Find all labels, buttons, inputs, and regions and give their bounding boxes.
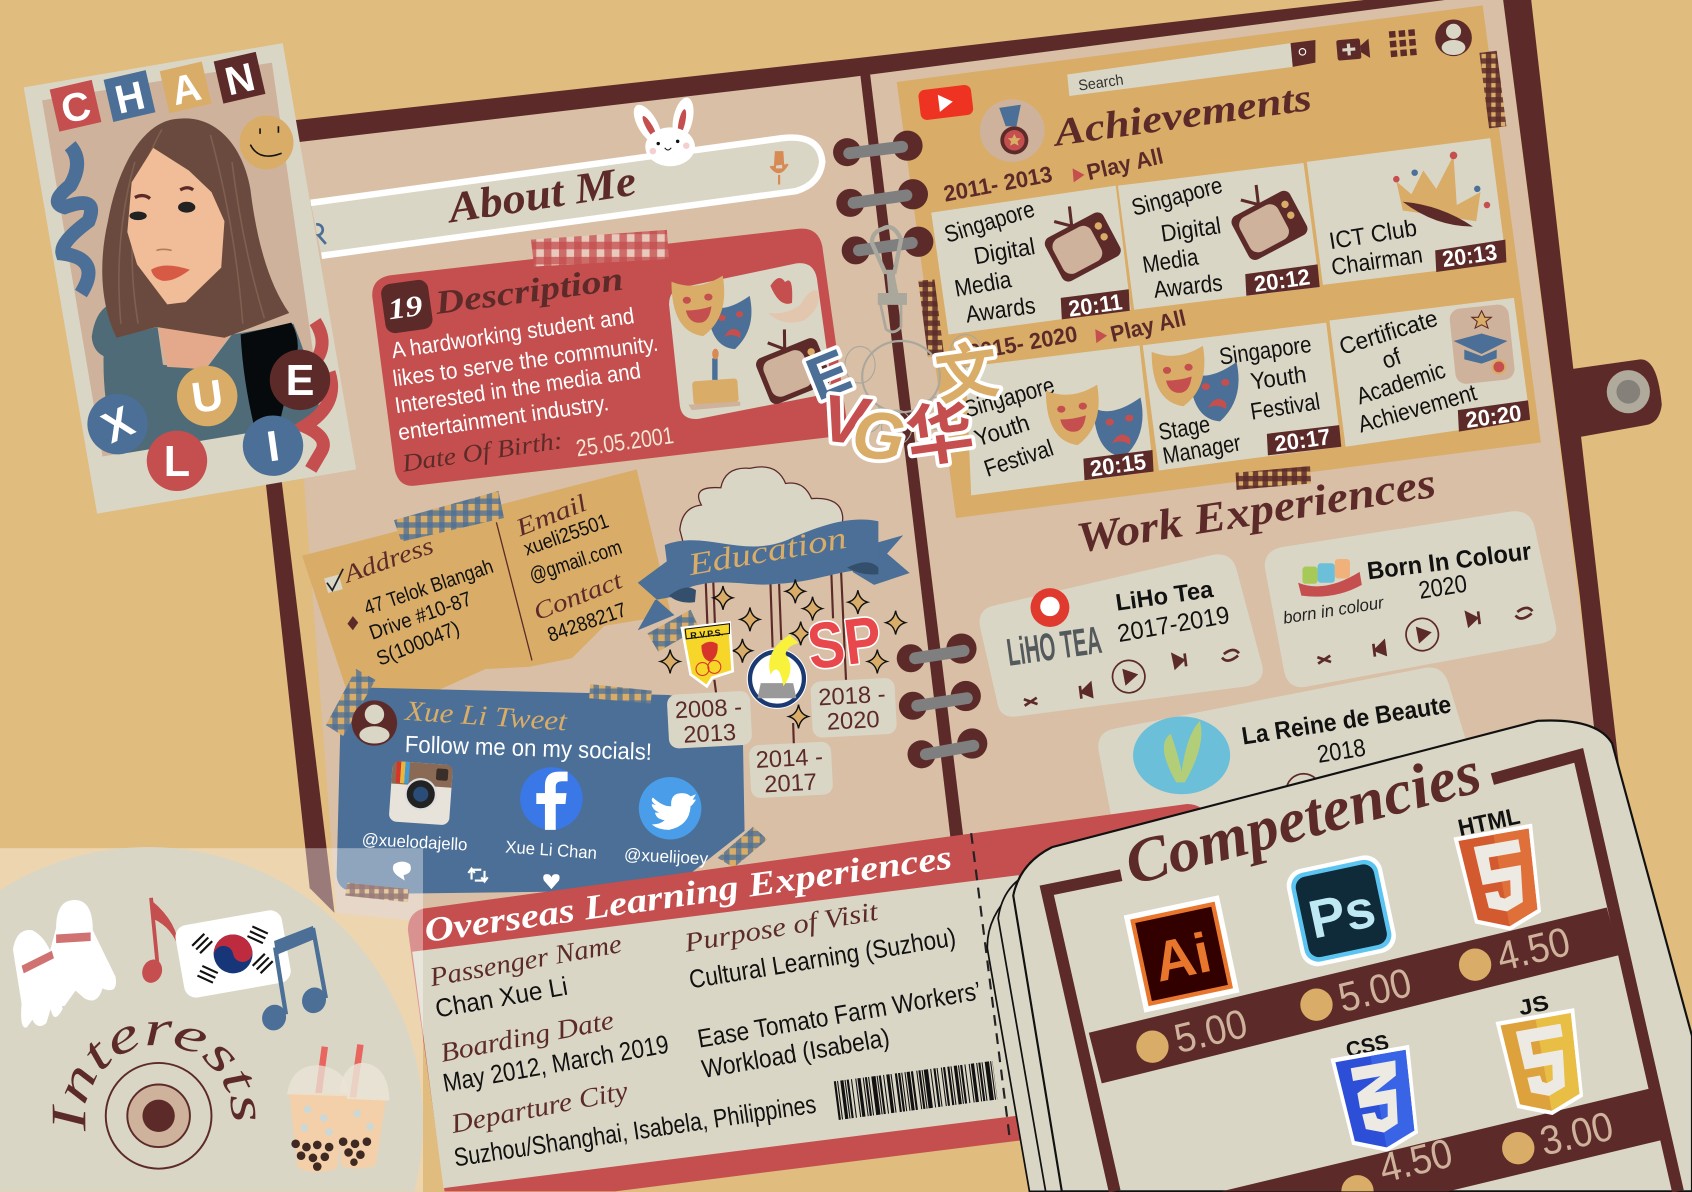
card: Stage Manager: Stage — [1157, 412, 1212, 446]
purpose of visit: Workload (Isabela) — [700, 1024, 892, 1084]
letter block C — [50, 80, 102, 134]
card: Digital Media Awards 1 — [931, 186, 1131, 335]
heading: Achievements: Achievements — [1048, 76, 1314, 155]
badge: RVPS — [682, 623, 733, 686]
panel: competencies device — [987, 720, 1692, 1191]
icon: JavaScript: JS — [1516, 990, 1551, 1020]
card: Singapore Youth Festival: Youth — [971, 410, 1033, 452]
icon: add video — [1336, 38, 1370, 61]
hanging strings — [706, 561, 846, 755]
card: Digital Media Awards 1: 20:11 — [1067, 288, 1124, 322]
letter circle L — [147, 431, 207, 491]
card: Born In Colour: Born In Colour — [1366, 538, 1533, 585]
address text: 47 Telok Blangah — [361, 555, 496, 620]
card: Born In Colour: 2020 — [1417, 571, 1469, 605]
boarding date — [438, 1005, 671, 1098]
icon: apps grid — [1389, 29, 1417, 57]
address text — [338, 532, 496, 670]
tag: 2008-2013 — [667, 691, 752, 749]
card: Digital Media Awards 1: Digital — [972, 234, 1037, 270]
card: ICT Club Chairman — [1307, 138, 1506, 285]
letter circle I — [239, 412, 307, 480]
rating: CSS3 — [1341, 1130, 1457, 1191]
email text — [511, 490, 625, 587]
card: Stage Manager — [1143, 323, 1341, 471]
tag: 2018-2020 — [810, 678, 897, 738]
departure city: Departure City — [448, 1075, 630, 1139]
heading: About Me: About Me — [442, 158, 639, 233]
letter block H — [104, 70, 156, 124]
panel: portrait card — [24, 43, 356, 514]
logo: LiHo: LiHO TEA — [1004, 619, 1104, 675]
rating: HTML5 — [1459, 918, 1574, 981]
description text: A hardworking student and — [390, 302, 636, 363]
card: Certificate of Academic Achievement: 20:20 — [1464, 399, 1523, 433]
icon: HTML5: HTML — [1456, 804, 1522, 842]
card: Digital Media Awards 2: Digital — [1159, 213, 1223, 248]
letter block A — [160, 62, 212, 116]
ribbon: red — [304, 322, 332, 469]
card: Digital Media Awards 2 — [1118, 163, 1320, 310]
letter circle U — [173, 362, 241, 430]
icon: pin — [347, 616, 358, 630]
tape — [326, 669, 767, 902]
age badge — [380, 279, 434, 334]
icon: Photoshop: Ps — [1304, 878, 1381, 950]
rating: JavaScript: 3.00 — [1536, 1103, 1618, 1164]
date of birth: Date Of Birth: — [399, 427, 565, 478]
icon: microphone — [770, 152, 788, 185]
icon: target — [106, 1063, 212, 1169]
icon: heart — [543, 874, 560, 889]
letter circle X: X — [95, 397, 141, 453]
icon: comment — [393, 862, 411, 881]
search box: Search — [1077, 71, 1125, 95]
purpose of visit: Ease Tomato Farm Workers’ — [696, 977, 983, 1054]
card: Stage Manager: Manager — [1161, 430, 1243, 470]
departure city: Suzhou/Shanghai, Isabela, Philippines — [452, 1091, 818, 1172]
card: La Reine de Beaute: La Reine de Beaute — [1240, 691, 1453, 751]
heading: Interests: Interests — [52, 1021, 256, 1132]
keychain — [845, 227, 981, 445]
panel: education — [638, 467, 910, 799]
ribbon banner: Education — [685, 520, 849, 582]
card: Singapore Youth Festival: Singapore — [961, 373, 1058, 423]
contact text: Contact — [530, 567, 627, 626]
icon: medal — [980, 99, 1045, 162]
player controls — [1314, 605, 1536, 664]
card: Stage Manager: Youth — [1249, 362, 1308, 396]
boarding date: Boarding Date — [438, 1005, 616, 1068]
tape — [1479, 51, 1506, 128]
logo: Born In Colour: born in colour — [1282, 592, 1386, 628]
panel: tweet socials — [326, 669, 767, 902]
portrait illustration — [92, 118, 322, 454]
letter block N — [214, 52, 266, 106]
ribbon banner — [638, 519, 910, 630]
tag: 2014-2017: 2014 - — [755, 744, 824, 774]
tape — [531, 230, 669, 267]
panel: about me search bar — [311, 138, 822, 256]
letter circle U: U — [189, 371, 226, 423]
letter block A: A — [167, 65, 205, 114]
logo: LiHo — [1004, 588, 1104, 675]
icon: smiley — [240, 115, 294, 169]
panel: achievements — [897, 5, 1541, 518]
address text: S(100047) — [373, 617, 463, 670]
card: Digital Media Awards 1: Singapore — [942, 197, 1038, 249]
tag: 2008-2013: 2008 - — [674, 695, 743, 724]
boarding date: May 2012, March 2019 — [441, 1031, 671, 1098]
description text: Interested in the media and — [393, 357, 642, 418]
icon: Illustrator: Ai — [1148, 920, 1216, 994]
badge: secondary school — [747, 635, 807, 709]
tape — [394, 491, 504, 542]
label: instagram: @xuelodajello — [361, 829, 468, 854]
icon: korean flag — [174, 908, 293, 999]
passenger name — [426, 928, 624, 1024]
icon: HTML5 — [1453, 804, 1550, 937]
letter block N: N — [221, 55, 259, 104]
card: LiHo Tea: LiHo Tea — [1114, 577, 1216, 617]
icon: facebook — [520, 767, 583, 830]
card: ICT Club Chairman: ICT Club — [1327, 216, 1419, 255]
right strap with button — [1571, 359, 1662, 437]
icon: youtube — [918, 84, 974, 121]
card: ICT Club Chairman: 20:13 — [1441, 239, 1499, 272]
tag: 2018-2020: 2018 - — [818, 682, 886, 711]
icon: CSS3 — [1330, 1029, 1427, 1159]
icon: bunny — [628, 96, 697, 166]
description text: entertainment industry. — [396, 389, 610, 445]
tag: 2014-2017 — [749, 741, 833, 799]
email text: xueli25501 — [521, 510, 612, 560]
heading: Work Experiences: Work Experiences — [1073, 460, 1439, 562]
passenger name: Passenger Name — [426, 928, 624, 992]
passenger name: Chan Xue Li — [433, 973, 570, 1024]
frame — [1047, 755, 1678, 1191]
barcode — [836, 1080, 995, 1101]
card: Certificate of Academic Achievement: Certificate — [1336, 306, 1441, 361]
heading: Overseas Learning Experiences: Overseas Learning Experiences — [422, 838, 954, 950]
icon: retweet — [468, 869, 488, 882]
logo: La Reine — [1133, 717, 1230, 794]
contact text: 84288217 — [544, 598, 629, 647]
card: Certificate of Academic Achievement: Achievement — [1355, 380, 1480, 439]
tag: 2018-2020: 2020 — [826, 707, 880, 736]
email text: Email — [511, 490, 591, 542]
card: Stage Manager: Singapore — [1218, 332, 1313, 371]
rating: HTML5: 4.50 — [1492, 918, 1574, 980]
rating bands — [1089, 908, 1620, 1083]
planner book — [258, 0, 1662, 977]
purpose of visit: Cultural Learning (Suzhou) — [687, 924, 958, 994]
panel: address and contact note — [302, 469, 671, 693]
icon: CSS3: CSS — [1344, 1029, 1391, 1062]
icon: blue music note — [259, 926, 330, 1034]
player controls — [1021, 647, 1242, 706]
sparkle stars — [660, 579, 905, 728]
letter circle E: E — [286, 357, 314, 405]
panel: overseas learning ticket — [408, 804, 1211, 1191]
letter block H: H — [111, 73, 149, 123]
rating: Photoshop — [1300, 959, 1416, 1021]
tag: 2014-2017: 2017 — [764, 770, 818, 798]
icon: twitter — [639, 777, 701, 840]
icon: diploma — [1449, 304, 1516, 385]
card: Singapore Youth Festival — [961, 345, 1154, 495]
card: La Reine de Beaute: 2018 — [1315, 735, 1368, 769]
card: Digital Media Awards 2: 20:12 — [1252, 263, 1312, 297]
letter circle I: I — [264, 422, 282, 471]
card: Digital Media Awards 1: Awards — [964, 293, 1037, 329]
icon: magnifier — [316, 224, 326, 244]
heading: Description: Description — [432, 261, 625, 322]
icon: Illustrator — [1124, 895, 1239, 1013]
card: La Reine de Beaute — [1098, 667, 1480, 874]
letter circle X — [77, 384, 158, 464]
row label 2011-2013: 2011- 2013 — [941, 161, 1054, 207]
address text: Drive #10-87 — [366, 587, 475, 645]
icon: Photoshop — [1283, 852, 1399, 969]
badge: SP: SP — [803, 602, 885, 683]
card: Stage Manager: Festival — [1249, 389, 1322, 426]
search box — [1067, 40, 1315, 96]
card: LiHo Tea: 2017-2019 — [1115, 602, 1232, 648]
tape — [918, 280, 944, 357]
sticker lettering: V — [818, 380, 875, 460]
card: Digital Media Awards 2: Awards — [1152, 271, 1224, 304]
rating: Illustrator: 5.00 — [1170, 1000, 1252, 1062]
heading: Xue Li Tweet: Xue Li Tweet — [403, 696, 569, 738]
purpose of visit — [681, 896, 983, 1084]
cloud — [680, 467, 843, 556]
row label 2015-2020: Play All — [1108, 304, 1188, 347]
panel: interests — [0, 847, 423, 1192]
card: LiHo Tea — [980, 554, 1263, 717]
purpose of visit: Purpose of Visit — [681, 896, 882, 958]
binder rings — [833, 131, 987, 768]
rating: Photoshop: 5.00 — [1334, 959, 1416, 1021]
row label 2011-2013 — [941, 142, 1166, 207]
card: Certificate of Academic Achievement: of — [1379, 344, 1405, 375]
contact text — [530, 567, 629, 647]
icon: check — [324, 569, 343, 593]
logo: Born In Colour — [1282, 559, 1386, 628]
tape — [1236, 466, 1311, 490]
card: Digital Media Awards 1: Media — [953, 267, 1014, 303]
letter circle E — [270, 350, 330, 410]
ribbon: blue — [58, 146, 91, 294]
rating: Illustrator — [1136, 1000, 1252, 1063]
sticker lettering: 华 — [902, 393, 978, 477]
rating: JavaScript — [1502, 1103, 1618, 1164]
image panel: hobbies — [669, 263, 833, 419]
card: ICT Club Chairman: Chairman — [1330, 242, 1424, 281]
sticker lettering: 文 — [931, 335, 1003, 413]
letter circle L: L — [164, 438, 190, 486]
icon: avatar — [1435, 19, 1472, 56]
sticker lettering — [797, 335, 1003, 477]
date of birth — [399, 423, 675, 478]
card: Singapore Youth Festival: 20:15 — [1088, 448, 1147, 482]
icon: instagram — [389, 761, 453, 825]
card: Stage Manager: 20:17 — [1273, 423, 1332, 457]
sticker lettering: E — [797, 335, 860, 413]
label: facebook: Xue Li Chan — [505, 837, 598, 863]
tag: 2008-2013: 2013 — [683, 720, 737, 749]
badge: RVPS: R.V.P.S. — [690, 627, 724, 641]
rating: CSS3: 4.50 — [1375, 1130, 1457, 1191]
email text: @gmail.com — [526, 536, 625, 587]
letter block C: C — [57, 83, 95, 133]
row label 2015-2020 — [966, 304, 1188, 365]
card: Singapore Youth Festival: Festival — [981, 436, 1057, 483]
tape — [647, 610, 699, 652]
card: Digital Media Awards 2: Singapore — [1129, 173, 1225, 222]
card: Certificate of Academic Achievement: Academic — [1354, 358, 1449, 410]
card: Certificate of Academic Achievement — [1329, 298, 1530, 447]
icon: JavaScript — [1496, 990, 1592, 1122]
card: Digital Media Awards 2: Media — [1141, 244, 1201, 279]
description text: likes to serve the community. — [391, 330, 660, 391]
heading: Competencies: Competencies — [1117, 736, 1488, 898]
card: Born In Colour — [1265, 511, 1556, 687]
address text: Address — [338, 532, 437, 589]
icon: crown — [1393, 152, 1490, 227]
icon: bubble tea — [287, 1045, 390, 1172]
avatar — [352, 700, 397, 746]
icon: shuttlecocks — [13, 900, 116, 1028]
row label 2011-2013: Play All — [1084, 142, 1166, 185]
age badge: 19 — [386, 290, 425, 326]
date of birth: 25.05.2001 — [575, 423, 675, 462]
tagline: Follow me on my socials! — [404, 732, 652, 766]
sticker lettering: G — [849, 396, 908, 476]
description text — [390, 302, 660, 445]
icon: red music note — [139, 898, 179, 986]
row label 2015-2020: 2015- 2020 — [966, 320, 1079, 365]
label: twitter: @xuelijoey — [623, 844, 709, 868]
panel: description — [372, 229, 846, 486]
